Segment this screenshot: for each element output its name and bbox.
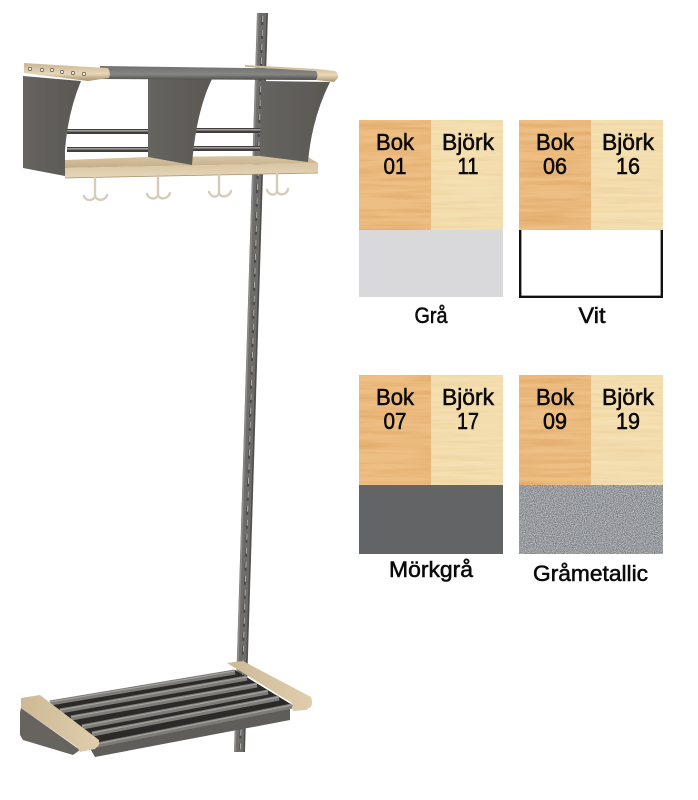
swatch: Bok 07 / Björk 17 / Mörkgrå [359, 375, 503, 582]
swatch: Bok 01 / Björk 11 / Grå: Bok [376, 129, 414, 155]
swatch: Bok 06 / Björk 16 / Vit: 16 [616, 153, 640, 179]
swatch: Bok 09 / Björk 19 / Gråmetallic: 09 [543, 408, 567, 434]
swatch: Bok 06 / Björk 16 / Vit: Bok [536, 129, 574, 155]
left bracket [20, 708, 80, 755]
swatch: Bok 06 / Björk 16 / Vit [519, 120, 663, 328]
swatch: Bok 09 / Björk 19 / Gråmetallic: Björk [602, 384, 654, 410]
swatch: Bok 01 / Björk 11 / Grå: 01 [384, 153, 406, 179]
left wood cap [24, 63, 110, 81]
shelf board [65, 156, 318, 178]
coat hooks [84, 174, 288, 200]
right wood end [227, 661, 312, 711]
right wood cap [245, 65, 338, 82]
swatch: Bok 07 / Björk 17 / Mörkgrå: Björk [442, 384, 494, 410]
upper hat shelf [23, 63, 338, 200]
swatch: Bok 09 / Björk 19 / Gråmetallic [519, 375, 663, 586]
swatch: Bok 07 / Björk 17 / Mörkgrå: 07 [384, 408, 406, 434]
swatch: Bok 06 / Björk 16 / Vit: 06 [543, 153, 567, 179]
top tube [100, 66, 320, 80]
front rail [88, 706, 290, 757]
wall upright rail [234, 13, 268, 752]
rack tubes [50, 670, 294, 747]
swatch: Bok 01 / Björk 11 / Grå: Grå [414, 303, 448, 328]
back rods [67, 128, 263, 152]
swatch: Bok 09 / Björk 19 / Gråmetallic: 19 [616, 408, 640, 434]
middle divider panel [148, 79, 212, 165]
swatch: Bok 01 / Björk 11 / Grå: Björk [442, 129, 494, 155]
swatch: Bok 07 / Björk 17 / Mörkgrå: Mörkgrå [389, 557, 474, 582]
swatch: Bok 06 / Björk 16 / Vit: Vit [578, 303, 606, 328]
swatch: Bok 06 / Björk 16 / Vit: Björk [602, 129, 654, 155]
swatch: Bok 07 / Björk 17 / Mörkgrå: Bok [376, 384, 414, 410]
left wood end [21, 695, 99, 752]
lower shoe rack [20, 661, 312, 757]
swatch: Bok 09 / Björk 19 / Gråmetallic: Bok [536, 384, 574, 410]
swatch: Bok 07 / Björk 17 / Mörkgrå: 17 [457, 408, 479, 434]
left side panel [23, 76, 81, 176]
right side panel [260, 81, 330, 162]
swatch: Bok 01 / Björk 11 / Grå [359, 120, 503, 328]
swatch: Bok 01 / Björk 11 / Grå: 11 [458, 153, 478, 179]
swatch: Bok 09 / Björk 19 / Gråmetallic: Gråmetallic [533, 561, 648, 586]
